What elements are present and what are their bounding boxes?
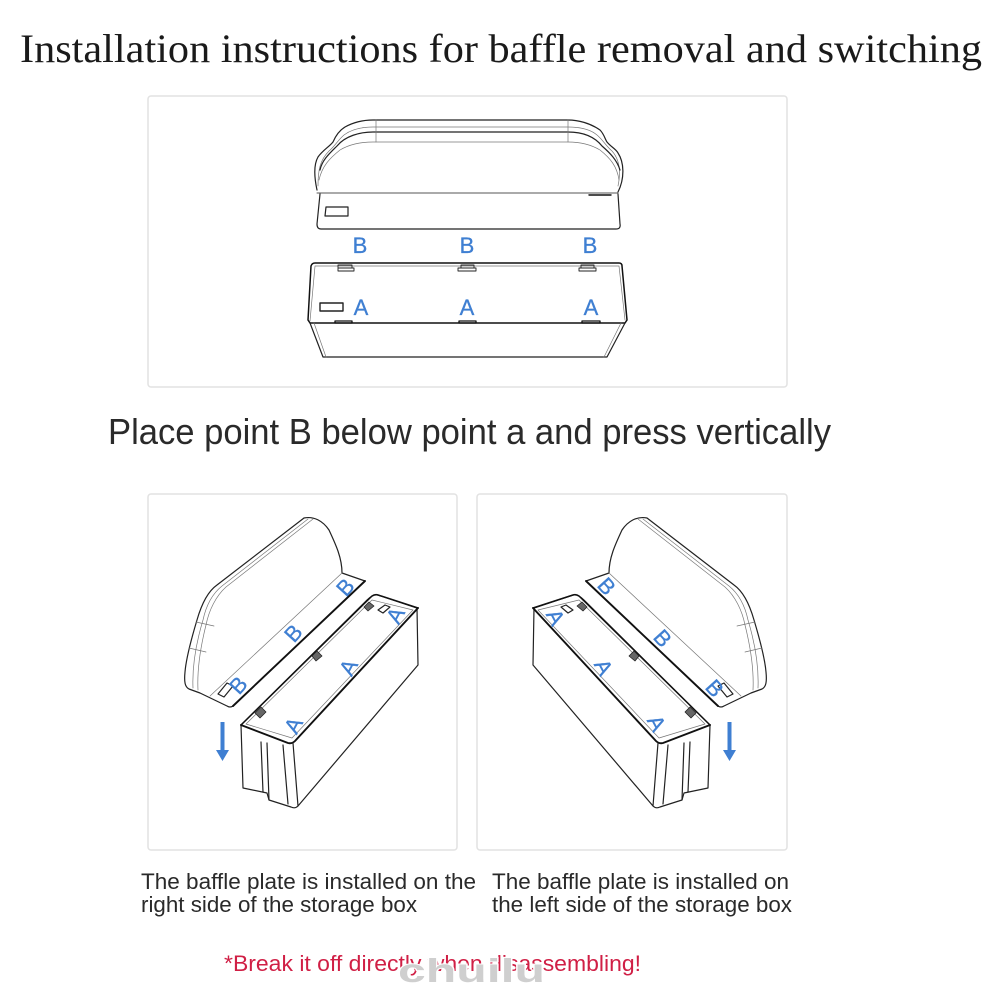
label: A points xyxy=(354,295,599,320)
warning note: *Break it off directly when disassembling! xyxy=(224,951,641,976)
label: A points: A xyxy=(541,605,570,630)
arrow: press down xyxy=(216,722,229,761)
label: A points: A xyxy=(354,295,369,320)
caption: left side installation: The baffle plate is installed on xyxy=(492,869,789,894)
label: A points: A xyxy=(279,713,308,738)
label: A points xyxy=(541,605,671,736)
panel: baffle on left side xyxy=(477,494,787,850)
baffle and box drawing xyxy=(533,518,766,808)
title: Installation instructions for baffle removal and switching xyxy=(20,26,982,71)
panel: baffle on right side xyxy=(148,494,457,850)
label: B points: B xyxy=(700,675,729,702)
label: A points xyxy=(279,603,410,738)
label: B points xyxy=(592,573,729,702)
label: B points xyxy=(353,233,597,258)
label: B points: B xyxy=(648,625,677,652)
label: B points xyxy=(224,574,360,699)
watermark: chuilu xyxy=(398,952,545,989)
label: B points: B xyxy=(592,573,621,600)
label: B points: B xyxy=(460,233,474,258)
caption: right side installation xyxy=(141,869,476,917)
label: A points: A xyxy=(334,655,363,680)
caption: left side installation: the left side of the storage box xyxy=(492,892,792,917)
arrow: press down xyxy=(723,722,736,761)
label: A points: A xyxy=(381,603,410,628)
storage box front view xyxy=(308,263,627,357)
label: B points: B xyxy=(224,672,253,699)
caption: left side installation xyxy=(492,869,792,917)
caption: right side installation: right side of the storage box xyxy=(141,892,417,917)
label: A points: A xyxy=(584,295,599,320)
caption: right side installation: The baffle plate is installed on the xyxy=(141,869,476,894)
label: B points: B xyxy=(279,620,308,647)
label: A points: A xyxy=(642,711,671,736)
baffle plate front view xyxy=(315,120,623,229)
label: B points: B xyxy=(353,233,367,258)
panel: front view xyxy=(148,96,787,387)
label: A points: A xyxy=(460,295,475,320)
label: B points: B xyxy=(583,233,597,258)
label: B points: B xyxy=(331,574,360,601)
label: A points: A xyxy=(589,655,618,680)
baffle and box drawing xyxy=(185,518,418,808)
instruction heading: Place point B below point a and press vertically xyxy=(108,411,831,452)
